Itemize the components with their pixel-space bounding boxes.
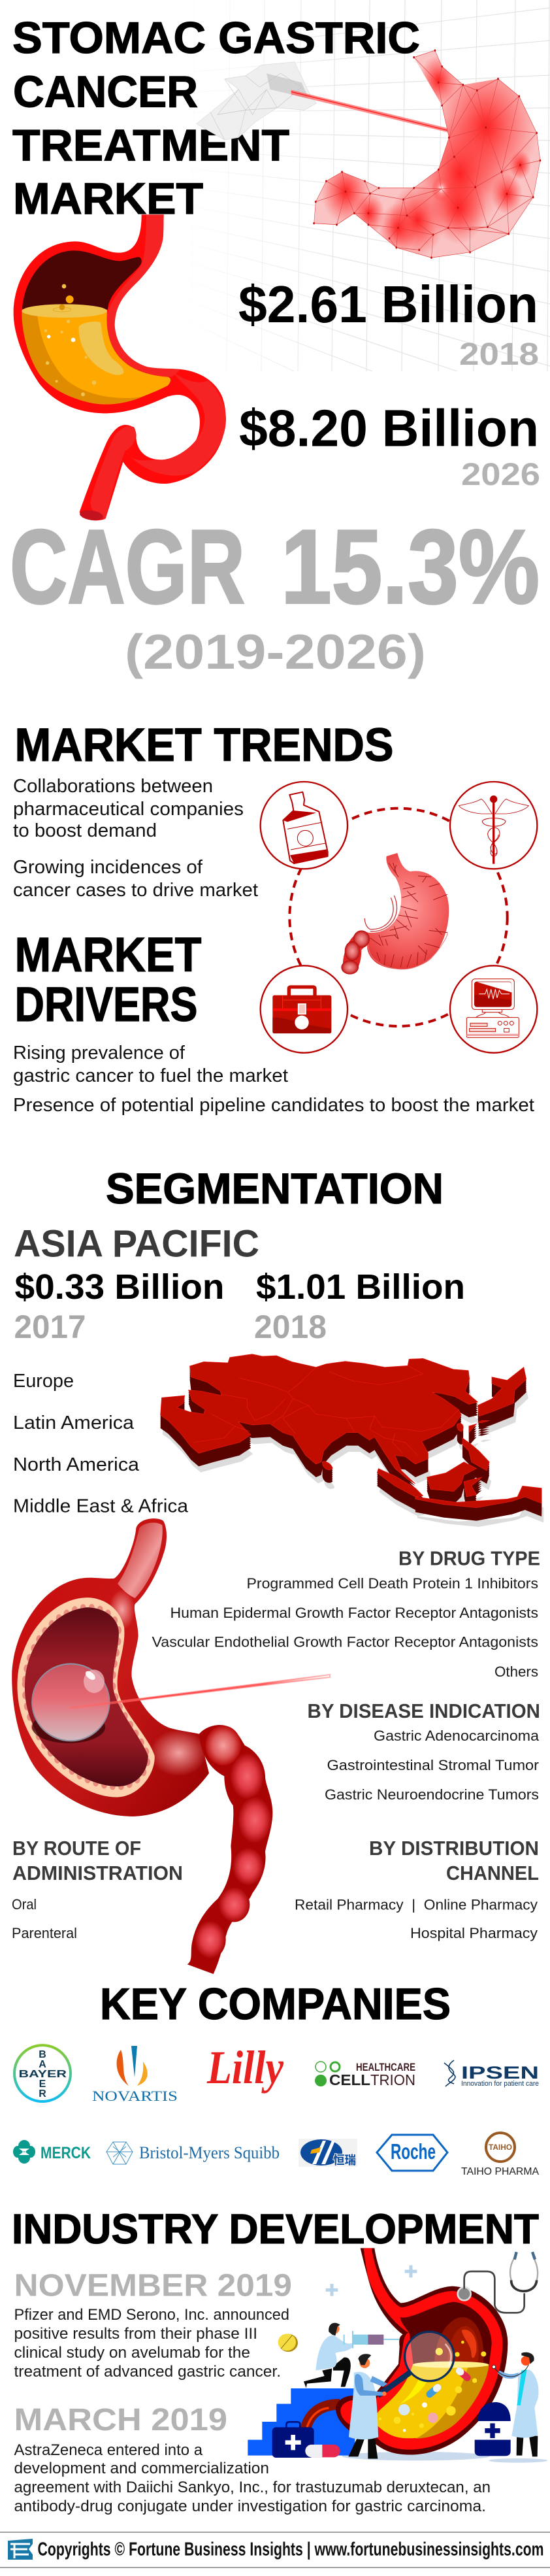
- capsule: [305, 2445, 340, 2457]
- stat: asia pacific 2018: 2018: [254, 1309, 327, 1345]
- panel: by route of administration: Oral: [12, 1896, 37, 1913]
- list: other regions: Middle East & Africa: [13, 1496, 189, 1516]
- market value 2026: 2026: [461, 458, 540, 492]
- heading: segmentation: SEGMENTATION: [106, 1164, 444, 1213]
- icon: low-poly hand with laser: [197, 62, 453, 140]
- heading: market drivers: [14, 928, 201, 1031]
- logo: lilly: Lilly: [206, 2041, 284, 2094]
- text: market trends points: pharmaceutical companies: [13, 799, 244, 820]
- plus signs: [326, 2266, 417, 2296]
- logo: bayer: BAYER: [18, 2069, 67, 2080]
- icon: low-poly stomach: [314, 50, 540, 258]
- text: market trends points: to boost demand: [13, 820, 157, 841]
- magnifying glass: [378, 2332, 454, 2396]
- logo: bayer: [14, 2045, 71, 2101]
- text: market drivers points: Rising prevalence of: [13, 1043, 186, 1063]
- panel: by disease indication: Gastric Neuroendocrine Tumors: [325, 1786, 539, 1803]
- market value 2026: [239, 399, 540, 492]
- logo: taiho pharma: TAIHO: [489, 2143, 512, 2152]
- logo: ipsen: [444, 2060, 539, 2088]
- title: [12, 13, 420, 224]
- logo: bayer: E: [39, 2079, 46, 2090]
- text: market trends points: [13, 776, 258, 901]
- title: MARKET: [13, 174, 203, 224]
- panel: by distribution channel: Hospital Pharmacy: [410, 1925, 538, 1941]
- stat: asia pacific 2018: [254, 1267, 465, 1345]
- footer: [0, 2532, 550, 2568]
- stat: asia pacific 2017: [14, 1267, 225, 1345]
- illustration: doctors examining stomach: [248, 2248, 547, 2463]
- logo: bayer: R: [39, 2088, 46, 2099]
- panel: by drug type: Vascular Endothelial Growth Factor Receptor Antagonists: [152, 1634, 538, 1650]
- panel: by drug type: [152, 1547, 540, 1680]
- heading: market drivers: MARKET: [14, 928, 201, 982]
- panel: by distribution channel: CHANNEL: [446, 1862, 539, 1884]
- panel: by route of administration: [12, 1837, 183, 1941]
- CAGR: CAGR: [10, 509, 245, 626]
- text: market drivers points: Presence of potential pipeline candidates to boost the market: [13, 1095, 534, 1116]
- development: november 2019: Pfizer and EMD Serono, Inc. announced: [14, 2306, 289, 2324]
- panel: by distribution channel: [295, 1837, 539, 1941]
- title: CANCER: [13, 67, 198, 116]
- heading: key companies: KEY COMPANIES: [100, 1979, 451, 2029]
- logo: novartis: NOVARTIS: [92, 2088, 178, 2104]
- panel: by distribution channel: BY DISTRIBUTION: [369, 1837, 539, 1860]
- stairs: [248, 2388, 355, 2456]
- development: november 2019: clinical study on avelumab for the: [14, 2344, 250, 2362]
- stat: asia pacific 2018: $1.01 Billion: [256, 1267, 465, 1307]
- heading: market drivers: DRIVERS: [14, 977, 197, 1031]
- market value 2026: $8.20 Billion: [239, 399, 539, 458]
- first-aid kit: [272, 2422, 314, 2458]
- icon: computer monitor: [450, 965, 537, 1053]
- logo: bayer: A: [39, 2059, 46, 2070]
- title: STOMAC GASTRIC: [12, 13, 420, 63]
- logo: novartis: [92, 2046, 178, 2104]
- icon: fortune business insights logo: [8, 2539, 33, 2560]
- development: march 2019: antibody-drug conjugate under investigation for gastric carcinoma.: [14, 2498, 486, 2515]
- logo: taiho pharma: [461, 2133, 539, 2177]
- panel: by disease indication: BY DISEASE INDICATION: [307, 1699, 540, 1722]
- CAGR: (2019-2026): [125, 624, 426, 679]
- logo: merck: [13, 2140, 91, 2164]
- doctor with syringe: [304, 2323, 400, 2388]
- doctor with magnifier: [348, 2354, 387, 2459]
- icon: caduceus: [450, 782, 537, 869]
- diagram: icons around stomach: [261, 782, 537, 1053]
- logo: taiho pharma: TAIHO PHARMA: [461, 2166, 539, 2177]
- panel: by disease indication: Gastrointestinal Stromal Tumor: [327, 1757, 539, 1773]
- logo: bristol-myers squibb: Bristol-Myers Squibb: [139, 2143, 280, 2162]
- medicine bottle: [475, 2402, 511, 2456]
- development: march 2019: MARCH 2019: [14, 2403, 227, 2437]
- logo: bristol-myers squibb: [106, 2142, 280, 2164]
- market value 2018: [238, 275, 539, 372]
- logo: hengrui: 恒瑞: [333, 2154, 356, 2167]
- stomach: [336, 2248, 508, 2455]
- icon: stomach with yellow liquid: [14, 214, 226, 522]
- panel: by route of administration: ADMINISTRATION: [12, 1862, 183, 1884]
- text: market drivers points: [13, 1043, 534, 1116]
- panel: by drug type: Others: [494, 1664, 538, 1680]
- duodenum: [305, 2404, 340, 2434]
- pills: [455, 2366, 472, 2383]
- stat: asia pacific 2017: $0.33 Billion: [14, 1267, 225, 1307]
- logo: roche: Roche: [391, 2139, 436, 2164]
- development: november 2019: positive results from their phase III: [14, 2325, 257, 2343]
- list: other regions: Europe: [13, 1371, 74, 1392]
- doctor with stethoscope: [492, 2352, 539, 2456]
- logo: celltrion: CELL: [329, 2071, 370, 2088]
- logo: roche: [377, 2135, 447, 2171]
- logo: hengrui: [299, 2139, 357, 2167]
- icon: anatomical stomach with polyp and intestine: [12, 1518, 272, 1974]
- logo: ipsen: Innovation for patient care: [461, 2080, 539, 2088]
- list: other regions: Latin America: [13, 1413, 135, 1433]
- icon: central stomach with veins: [341, 853, 449, 975]
- development: november 2019: NOVEMBER 2019: [14, 2268, 292, 2303]
- CAGR: [10, 509, 540, 679]
- panel: by drug type: Programmed Cell Death Protein 1 Inhibitors: [247, 1575, 538, 1592]
- panel: by drug type: Human Epidermal Growth Factor Receptor Antagonists: [170, 1605, 538, 1621]
- icon: medicine bottle: [261, 782, 348, 869]
- development: march 2019: [14, 2403, 491, 2515]
- logo: merck: MERCK: [40, 2144, 91, 2162]
- heading: market trends: MARKET TRENDS: [14, 720, 393, 771]
- panel: by distribution channel: Retail Pharmacy | Online Pharmacy: [295, 1897, 538, 1913]
- panel: by route of administration: Parenteral: [12, 1925, 77, 1941]
- text: market trends points: cancer cases to drive market: [13, 880, 258, 901]
- logo: bayer: B: [39, 2049, 46, 2060]
- stat: asia pacific 2017: 2017: [14, 1309, 86, 1345]
- development: november 2019: [14, 2268, 292, 2381]
- logo: ipsen: IPSEN: [461, 2063, 539, 2083]
- panel: by disease indication: [307, 1699, 540, 1803]
- market value 2018: $2.61 Billion: [238, 275, 538, 333]
- title: TREATMENT: [12, 120, 289, 170]
- development: march 2019: development and commercialization: [14, 2460, 269, 2477]
- heading: industry development: INDUSTRY DEVELOPMENT: [12, 2205, 539, 2252]
- text: market trends points: Growing incidences of: [13, 857, 203, 878]
- market value 2018: 2018: [459, 337, 539, 372]
- panel: by route of administration: BY ROUTE OF: [12, 1837, 141, 1860]
- development: march 2019: agreement with Daiichi Sankyo, Inc., for trastuzumab deruxtecan, an: [14, 2479, 491, 2496]
- text: market trends points: Collaborations between: [13, 776, 213, 797]
- list: other regions: [13, 1371, 189, 1516]
- text: market drivers points: gastric cancer to fuel the market: [13, 1065, 288, 1086]
- laser beam: [70, 1675, 330, 1709]
- list: other regions: North America: [13, 1454, 140, 1475]
- map: asia pacific: [161, 1354, 543, 1527]
- logo: celltrion: TRION: [370, 2071, 415, 2088]
- panel: by disease indication: Gastric Adenocarcinoma: [374, 1728, 540, 1744]
- heading: asia pacific: ASIA PACIFIC: [14, 1222, 259, 1265]
- development: march 2019: AstraZeneca entered into a: [14, 2441, 202, 2459]
- development: november 2019: treatment of advanced gastric cancer.: [14, 2363, 281, 2381]
- logo: celltrion: HEALTHCARE: [356, 2061, 415, 2073]
- pill: yellow tablet: [278, 2333, 298, 2352]
- panel: by drug type: BY DRUG TYPE: [398, 1547, 540, 1570]
- background perspective grid: [176, 0, 550, 371]
- logo: celltrion: [315, 2061, 415, 2088]
- stethoscope: [458, 2252, 538, 2313]
- icon: toolbox: [261, 965, 348, 1053]
